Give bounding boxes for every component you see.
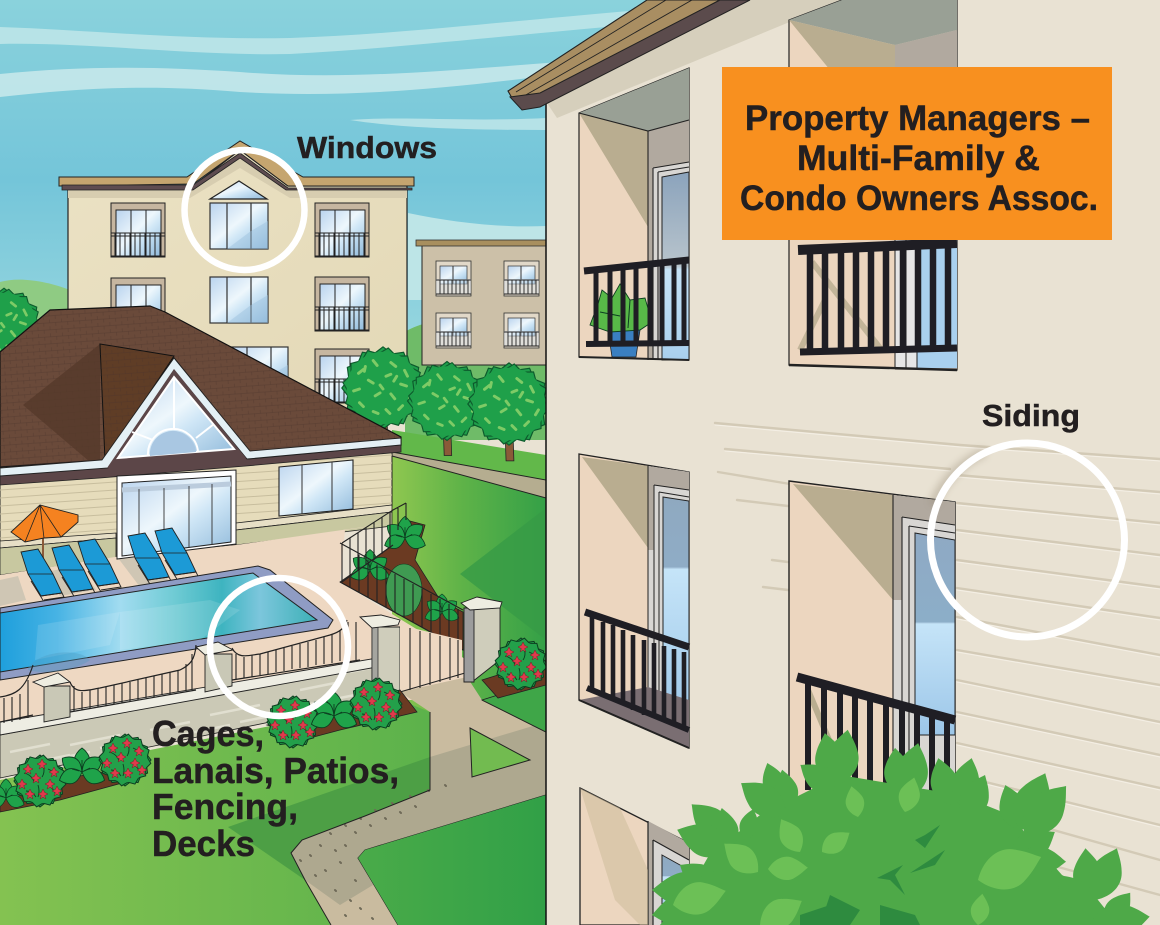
label: windows: Windows xyxy=(297,130,437,165)
clubhouse window xyxy=(279,460,353,516)
siding lines xyxy=(715,423,1160,895)
shading around siding circle xyxy=(933,452,985,505)
balcony window lower right xyxy=(789,481,955,925)
callout circle: siding xyxy=(930,443,1124,637)
back apartment building with windows xyxy=(59,141,414,416)
main building wall xyxy=(546,0,1160,925)
trees xyxy=(0,284,554,500)
label: cages, lanais, patios, fencing, decks: Cages, xyxy=(152,713,264,754)
railing xyxy=(596,260,684,345)
lawn patches xyxy=(358,680,546,925)
flower beds and shrubs xyxy=(0,635,550,812)
roof fascia and gable xyxy=(0,358,401,485)
foreground bush xyxy=(649,727,1152,925)
balcony window upper left xyxy=(579,68,689,360)
label: cages, lanais, patios, fencing, decks: Fencing, xyxy=(152,786,298,827)
chair shadows xyxy=(0,553,168,606)
balcony window lower left xyxy=(579,454,689,748)
sky xyxy=(0,0,660,360)
garden lawn, right xyxy=(392,452,546,925)
planter and side fence xyxy=(340,503,463,650)
orange title box: Property Managers – xyxy=(745,99,1090,138)
balcony window bottom xyxy=(580,788,689,925)
label: cages, lanais, patios, fencing, decks: Decks xyxy=(152,823,255,864)
label: cages, lanais, patios, fencing, decks: Lanais, Patios, xyxy=(152,750,399,791)
orange title box xyxy=(722,67,1112,240)
arched railing xyxy=(0,620,360,722)
clubhouse xyxy=(0,306,470,730)
roof xyxy=(0,306,401,467)
pool xyxy=(0,566,333,680)
callout circle: fencing xyxy=(210,578,348,716)
clubhouse wall xyxy=(0,440,392,575)
sliding door xyxy=(117,470,236,559)
gate post xyxy=(461,597,502,682)
potted plant xyxy=(590,284,652,357)
label: siding: Siding xyxy=(982,398,1080,433)
front lawn xyxy=(0,700,430,925)
walking path xyxy=(291,677,546,925)
label: cages, lanais, patios, fencing, decks xyxy=(152,713,399,864)
stone wall and front railing xyxy=(0,597,502,778)
distant building xyxy=(416,240,548,365)
lounge chairs xyxy=(21,528,198,605)
orange title box: Multi-Family & xyxy=(797,139,1040,178)
wall posts xyxy=(33,615,400,722)
distant hills xyxy=(0,280,546,440)
umbrella xyxy=(11,505,78,562)
gate xyxy=(400,625,465,692)
orange title box: Condo Owners Assoc. xyxy=(740,179,1098,218)
roof of main building xyxy=(508,0,750,110)
callout circle: windows xyxy=(184,150,304,270)
balcony window upper right xyxy=(789,0,957,370)
patio deck xyxy=(0,523,470,730)
